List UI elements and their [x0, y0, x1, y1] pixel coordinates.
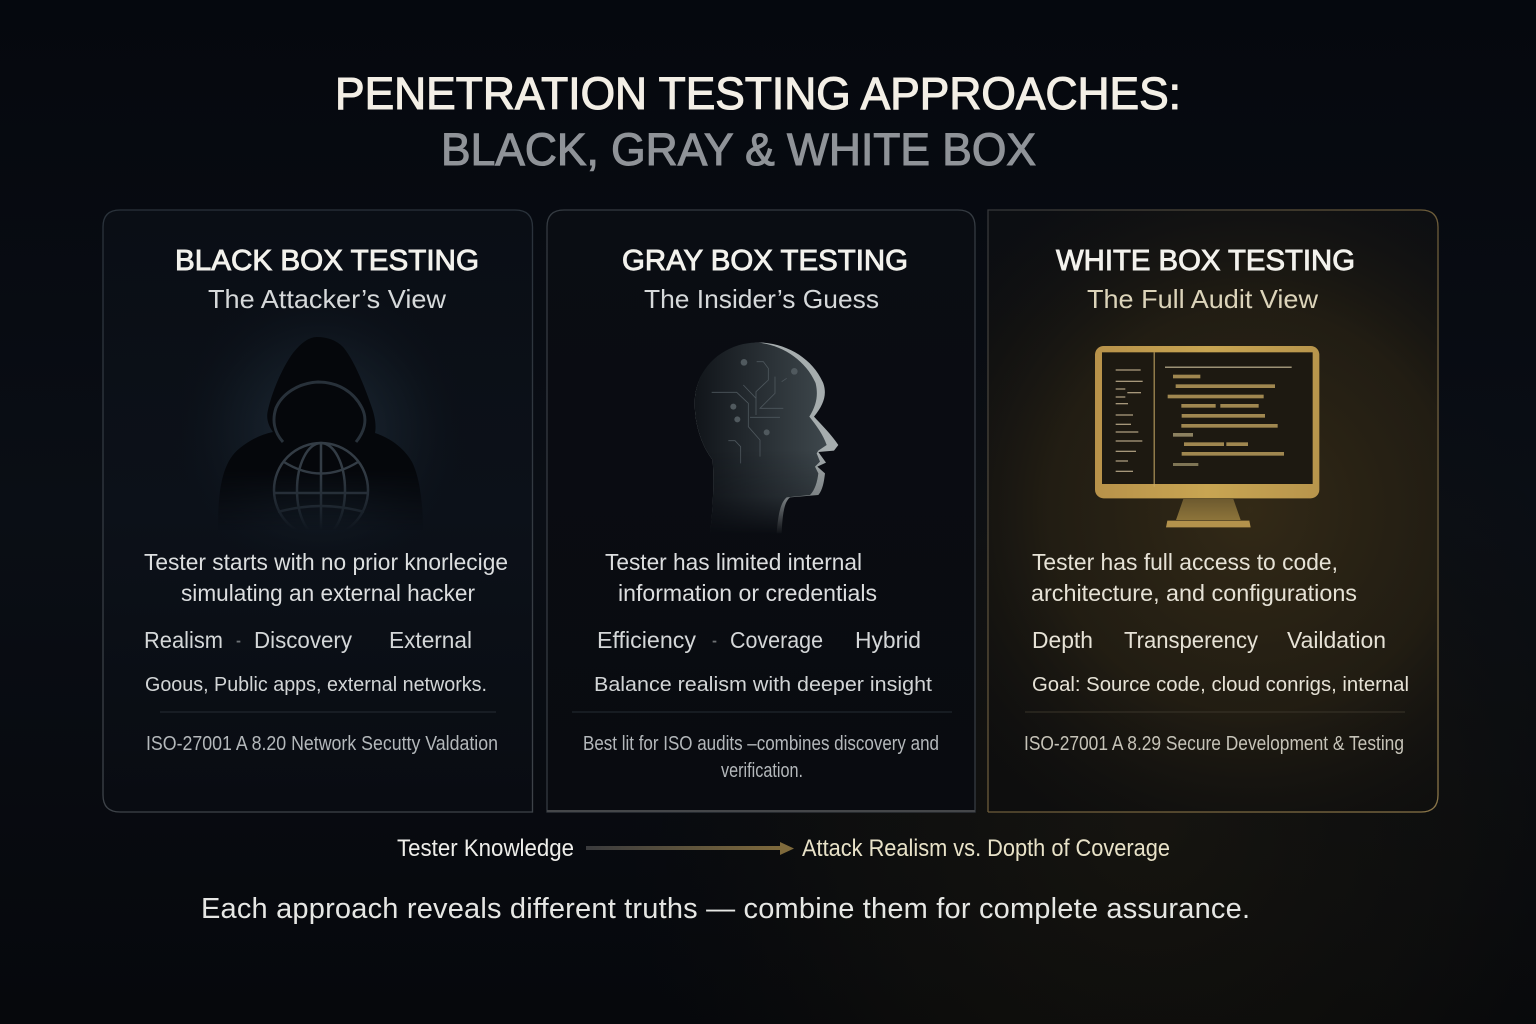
subheading: the full audit view: The Full Audit View — [1087, 284, 1318, 314]
keywords — [597, 627, 921, 653]
keywords: Realism — [144, 627, 223, 653]
keywords: Coverage — [730, 627, 823, 653]
description: information or credentials — [618, 580, 877, 606]
keywords: Efficiency — [597, 627, 696, 653]
axis label: tester knowledge: Tester Knowledge — [397, 835, 574, 862]
keywords: External — [389, 627, 472, 653]
title: BLACK, GRAY & WHITE BOX — [441, 124, 1036, 175]
keywords: Vaildation — [1287, 627, 1386, 653]
title: PENETRATION TESTING APPROACHES: — [335, 68, 1181, 119]
subheading: the insider's guess: The Insider’s Guess — [644, 284, 879, 314]
description: simulating an external hacker — [181, 580, 475, 606]
iso reference: ISO-27001 A 8.29 Secure Development & Testing — [1024, 733, 1404, 755]
closing statement: Each approach reveals different truths — combine them for complete assurance. — [201, 893, 1250, 925]
description — [144, 549, 508, 606]
keywords — [1032, 627, 1386, 653]
axis label: attack realism vs depth: Attack Realism vs. Dopth of Coverage — [802, 835, 1170, 862]
heading: gray box: GRAY BOX TESTING — [622, 245, 908, 277]
panel: gray box testing — [547, 210, 975, 812]
goals: Goous, Public apps, external networks. — [145, 674, 487, 696]
keywords: Transperency — [1124, 627, 1258, 653]
keywords: Depth — [1032, 627, 1093, 653]
subheading: the attacker's view: The Attacker’s View — [208, 284, 446, 314]
arrow — [586, 842, 794, 855]
description: Tester has limited internal — [605, 549, 862, 575]
keywords: - — [712, 627, 717, 653]
description: Tester starts with no prior knorlecige — [144, 549, 508, 575]
goals: Goal: Source code, cloud conrigs, internal — [1032, 674, 1409, 696]
icon: head with circuits — [695, 343, 838, 533]
goals: Balance realism with deeper insight — [594, 674, 932, 696]
panel: white box testing — [988, 210, 1438, 812]
keywords: Hybrid — [855, 627, 921, 653]
heading: white box: WHITE BOX TESTING — [1056, 245, 1355, 277]
iso reference: ISO-27001 A 8.20 Network Secutty Valdation — [146, 733, 498, 755]
iso reference — [583, 733, 939, 782]
description — [605, 549, 877, 606]
description — [1031, 549, 1357, 606]
keywords — [144, 627, 472, 653]
icon: monitor with code — [1095, 346, 1319, 527]
iso reference: verification. — [721, 760, 803, 782]
keywords: - — [236, 627, 241, 653]
keywords: Discovery — [254, 627, 352, 653]
description: architecture, and configurations — [1031, 580, 1357, 606]
description: Tester has full access to code, — [1032, 549, 1338, 575]
heading: black box: BLACK BOX TESTING — [175, 245, 479, 277]
icon: hooded figure with globe — [219, 337, 421, 516]
iso reference: Best lit for ISO audits –combines discovery and — [583, 733, 939, 755]
title — [335, 68, 1181, 175]
panel: black box testing — [103, 210, 532, 812]
